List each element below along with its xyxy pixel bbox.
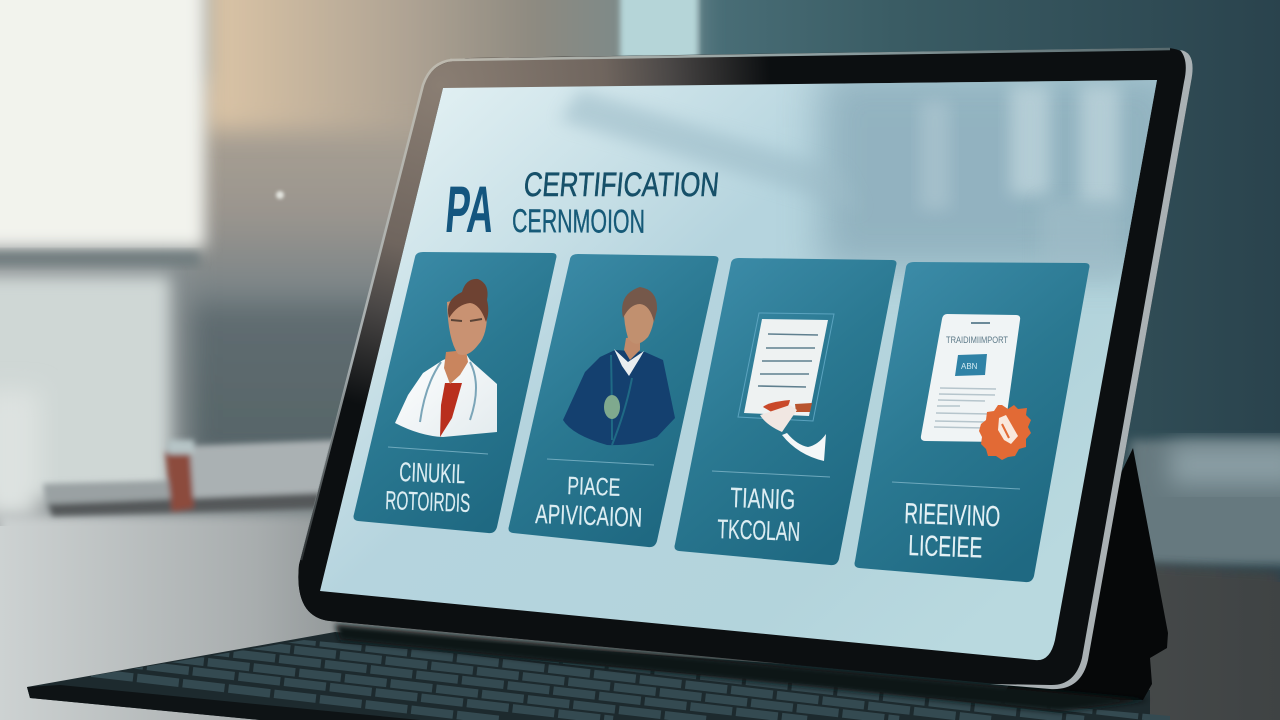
label — [385, 457, 471, 518]
icon: license document with seal — [921, 314, 1031, 460]
label — [904, 498, 1001, 565]
divider — [388, 447, 488, 454]
label: CINUKIL — [399, 457, 466, 489]
icon: license document with seal: ABN — [961, 362, 978, 371]
panel: card 2 — [508, 254, 718, 547]
label: PIACE — [567, 472, 621, 502]
label — [535, 472, 643, 533]
tablet left edge highlight — [301, 60, 452, 560]
tablet top edge highlight — [450, 49, 1170, 60]
label: TKCOLAN — [717, 514, 801, 547]
icon: checklist document with pen — [738, 313, 834, 461]
divider — [892, 482, 1020, 489]
divider — [547, 459, 654, 465]
label: LICEIEE — [908, 530, 983, 565]
divider — [712, 471, 830, 477]
panel: card 4 — [854, 262, 1090, 582]
portrait: clinician in navy cardigan — [563, 287, 675, 445]
heading: PA: PA — [443, 173, 497, 247]
portrait: clinician in white coat — [395, 279, 497, 437]
subheading: CERNMOION — [512, 202, 645, 240]
tablet — [298, 48, 1193, 689]
tablet right silver edge — [990, 50, 1193, 689]
heading: certification: CERTIFICATION — [522, 166, 721, 204]
shadow strip under tablet — [335, 624, 1150, 712]
tablet left bezel — [298, 54, 800, 665]
tablet kickstand — [1000, 448, 1168, 700]
panel: card 1 — [354, 252, 556, 533]
keyboard — [27, 632, 1170, 720]
label: APIVICAION — [535, 499, 643, 533]
label — [717, 482, 801, 547]
label: ROTOIRDIS — [385, 485, 471, 518]
label: TIANIG — [730, 482, 796, 515]
icon: badge — [604, 395, 620, 419]
icon: license document with seal: TRAIDIMIIMPORT — [946, 335, 1008, 345]
tablet body — [298, 48, 1192, 689]
screen — [300, 70, 1180, 680]
panel: card 3 — [674, 258, 896, 565]
icon: orange seal — [979, 405, 1031, 460]
label: RIEEIVINO — [904, 498, 1001, 533]
blurred diploma scroll — [43, 440, 340, 516]
